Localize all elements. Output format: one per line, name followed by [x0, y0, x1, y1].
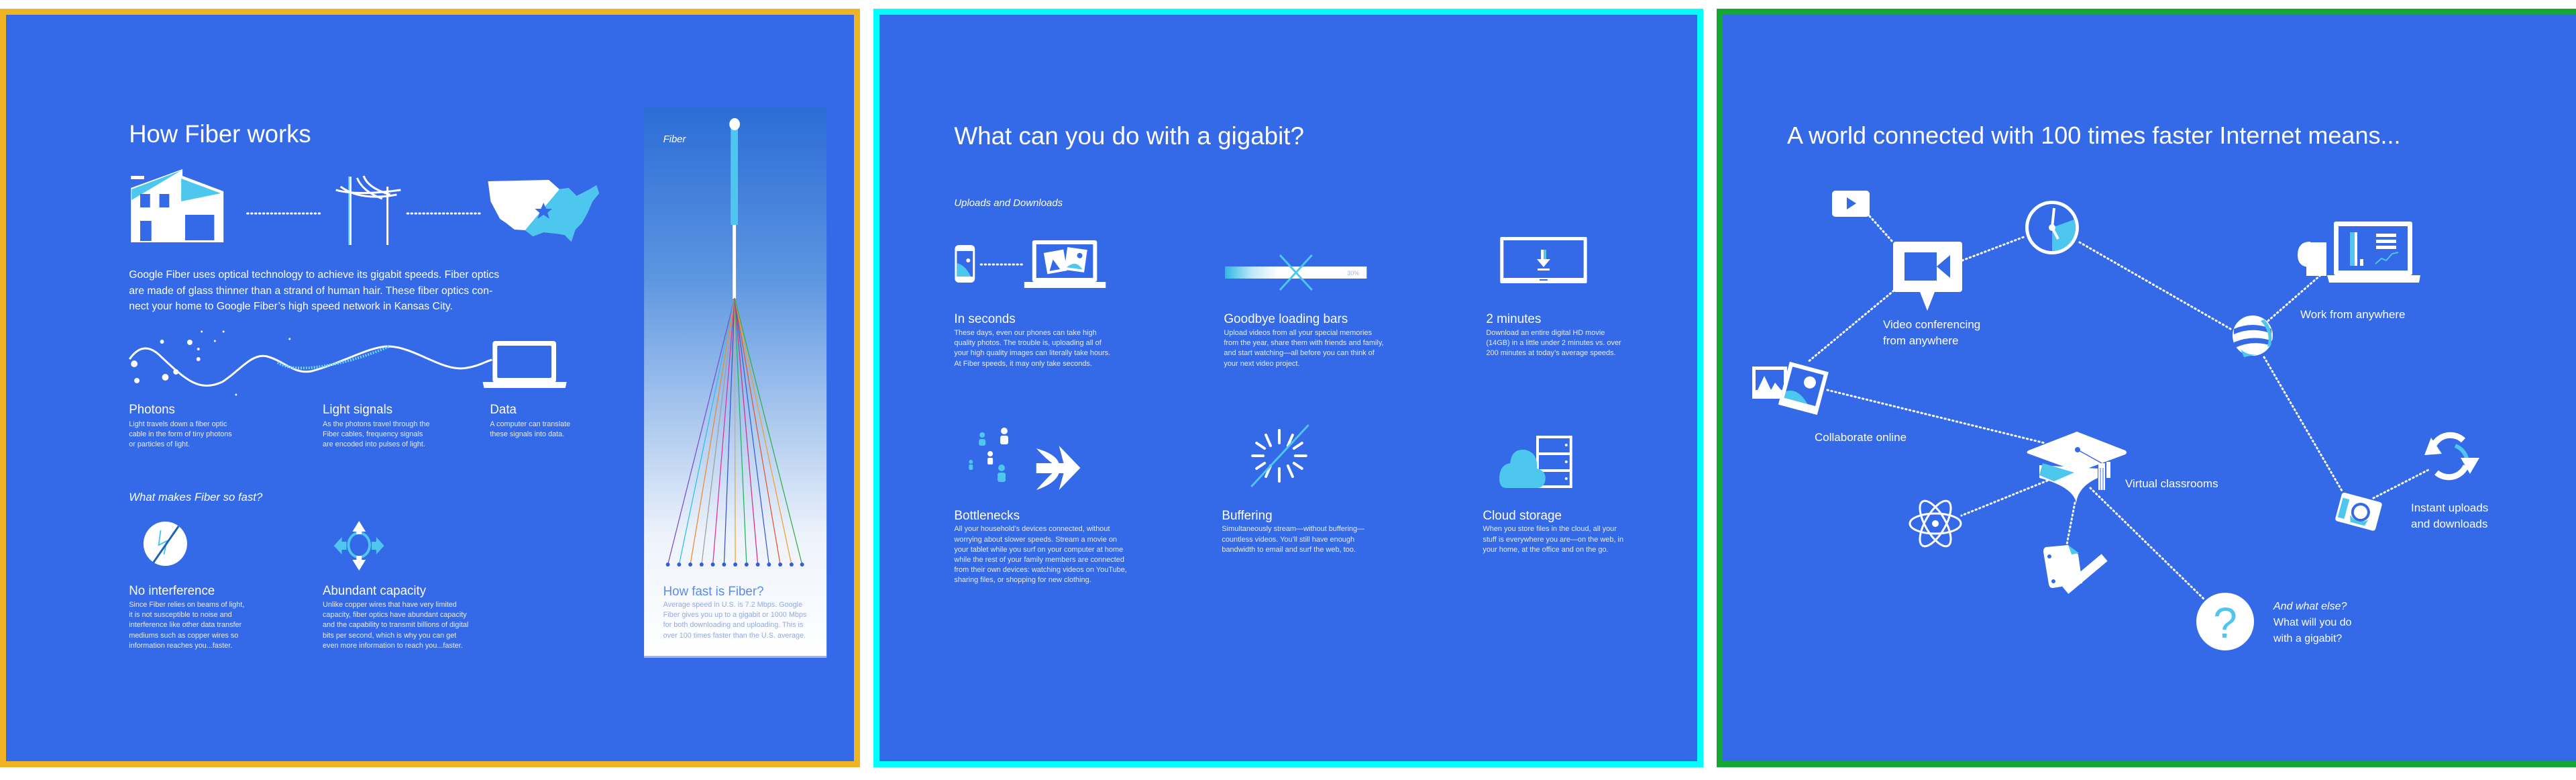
label: instant uploads: and downloads [2411, 518, 2487, 530]
text: no interference: No interference [129, 583, 215, 597]
icon: phone to laptop photos [955, 240, 1106, 288]
text: in seconds: your high quality images can literally take hours. [954, 349, 1110, 357]
text: light signals [323, 402, 430, 448]
text: no interference: information reaches you...faster. [129, 642, 232, 650]
text: photons [129, 402, 232, 448]
illustration: photon wave to laptop [129, 330, 567, 396]
text: abundant capacity: Unlike copper wires that have very limited [323, 601, 457, 609]
label: instant uploads: Instant uploads [2411, 501, 2488, 514]
text: in seconds: These days, even our phones can take high [954, 329, 1097, 337]
text: data: these signals into data. [490, 430, 564, 438]
text: how fast is fiber: Fiber gives you up to a gigabit or 1000 Mbps [663, 611, 807, 619]
label: and what else [2273, 601, 2352, 644]
text: data [490, 402, 570, 438]
text: buffering: bandwidth to email and surf the web, too. [1222, 546, 1356, 554]
connector lines [1807, 216, 2428, 600]
text: no interference [129, 583, 244, 650]
text: photons: Light travels down a fiber optic [129, 420, 227, 428]
text: buffering [1222, 509, 1364, 554]
text: bottlenecks: worrying about slower speeds. Stream a movie on [953, 536, 1117, 544]
text: photons: or particles of light. [129, 440, 190, 448]
panel: a world connected [1720, 12, 2576, 764]
text: light signals: are encoded into pulses of light. [323, 440, 425, 448]
icon: cloud storage [1499, 436, 1572, 488]
text: how fast is fiber: for both downloading and uploading. This is [663, 621, 804, 629]
icon: paper and ruler [2043, 545, 2108, 594]
text: in seconds: In seconds [954, 312, 1016, 326]
label: Fiber: Fiber [663, 134, 686, 145]
icon: abundant capacity [334, 521, 384, 571]
text: abundant capacity: Abundant capacity [323, 583, 427, 597]
text: intro paragraph [129, 269, 499, 312]
icon: no interference [144, 522, 187, 566]
icon: graduation cap [2027, 432, 2127, 503]
text: light signals: Light signals [323, 402, 392, 416]
label: work from anywhere: Work from anywhere [2300, 308, 2406, 321]
panel: how fiber works [3, 12, 857, 764]
text: bottlenecks: your tablet while you surf on your computer at home [954, 546, 1123, 554]
text: 2 minutes: (14GB) in a little under 2 minutes vs. over [1486, 339, 1621, 347]
text: light signals: As the photons travel through the [323, 420, 430, 428]
icon: play button [1832, 191, 1870, 217]
text: goodbye loading bars: your next video project. [1224, 360, 1299, 368]
icon: question mark: ? [2213, 599, 2237, 647]
panel: fiber cable speed [644, 107, 826, 658]
text: bottlenecks [953, 509, 1127, 584]
text: how fast is fiber: Average speed in U.S. is 7.2 Mbps. Google [663, 601, 802, 609]
icon: sync arrows [2424, 435, 2479, 477]
text: abundant capacity: bits per second, which is why you can get [323, 632, 456, 640]
icon: monitor download [1500, 237, 1587, 283]
title: What can you do with a gigabit? [954, 122, 1304, 150]
text: in seconds: At Fiber speeds, it may only take seconds. [954, 360, 1092, 368]
text: how fast is fiber: over 100 times faster than the U.S. average. [663, 632, 806, 640]
text: no interference: it is not susceptible to noise and [129, 611, 232, 619]
text: abundant capacity: capacity, fiber optics have abundant capacity [323, 611, 467, 619]
text: goodbye loading bars: and start watching—all before you can think of [1224, 349, 1375, 357]
panel: what can you do with a gigabit [876, 12, 1700, 764]
label: and what else: And what else? [2273, 601, 2347, 612]
icon: loading bar: 30% [1347, 270, 1359, 277]
icon: buffering spinner [1252, 426, 1308, 486]
title: How Fiber works: How Fiber works [129, 120, 311, 148]
icon: clock [2025, 201, 2079, 254]
icon: house [131, 169, 223, 242]
label: video conferencing: Video conferencing [1883, 318, 1980, 331]
label: video conferencing [1883, 318, 1980, 347]
text: 2 minutes [1486, 312, 1621, 357]
icon: laptop with mug [2298, 222, 2420, 283]
text: how fast is fiber: How fast is Fiber? [663, 584, 763, 598]
icon: camera [2334, 492, 2383, 532]
icon: globe [2233, 315, 2273, 357]
text: data: Data [490, 402, 517, 416]
text: cloud storage: stuff is everywhere you are—on the web, in [1483, 536, 1623, 544]
title: A world connected with 100 times faster Internet means... [1787, 121, 2400, 149]
text: no interference: interference like other data transfer [129, 621, 241, 629]
text: abundant capacity: and the capability to transmit billions of digital [323, 621, 468, 629]
text: intro paragraph: Google Fiber uses optical technology to achieve its gigabit speeds. Fiber optics [129, 269, 499, 281]
icon: video conferencing [1893, 242, 1962, 311]
label: virtual classrooms: Virtual classrooms [2125, 477, 2218, 490]
text: no interference: Since Fiber relies on beams of light, [129, 601, 244, 609]
text: intro paragraph: are made of glass thinner than a strand of human hair. These fiber optics con- [129, 285, 492, 297]
text: no interference: mediums such as copper wires so [129, 632, 238, 640]
text: buffering: Buffering [1222, 509, 1273, 523]
fiber cable [666, 118, 804, 567]
text: data: A computer can translate [490, 420, 570, 428]
text: goodbye loading bars: from the year, share them with friends and family, [1224, 339, 1384, 347]
text: how fast is fiber [663, 584, 807, 640]
text: goodbye loading bars: Upload videos from all your special memories [1224, 329, 1373, 337]
text: in seconds: quality photos. The trouble is, uploading all of [954, 339, 1102, 347]
icon: bottleneck people [969, 428, 1080, 490]
icon: US map [488, 180, 599, 242]
text: cloud storage [1483, 509, 1623, 554]
text: cloud storage: Cloud storage [1483, 509, 1562, 523]
text: cloud storage: When you store files in the cloud, all your [1483, 525, 1617, 533]
text: bottlenecks: All your household’s devices connected, without [954, 525, 1110, 533]
label: video conferencing: from anywhere [1883, 334, 1958, 347]
icon: utility pole [336, 176, 400, 245]
text: 2 minutes: 200 minutes at today’s average speeds. [1486, 349, 1616, 357]
text: photons: Photons [129, 402, 175, 416]
icon: question mark [2196, 593, 2254, 650]
text: bottlenecks: Bottlenecks [954, 509, 1020, 523]
text: goodbye loading bars: Goodbye loading bars [1224, 312, 1348, 326]
subheading: uploads and downloads: Uploads and Downloads [954, 197, 1063, 209]
label: collaborate online: Collaborate online [1815, 431, 1907, 444]
text: bottlenecks: sharing files, or shopping for new clothing. [954, 576, 1091, 584]
icon: laptop [483, 341, 567, 388]
text: abundant capacity [323, 583, 468, 650]
label: and what else: What will you do [2273, 617, 2352, 628]
text: cloud storage: your home, at the office and on the go. [1483, 546, 1609, 554]
icon: collaborate photos [1752, 362, 1829, 415]
text: in seconds [954, 312, 1110, 368]
icon: atom [1910, 497, 1961, 550]
text: bottlenecks: from their own devices: watching videos on YouTube, [954, 566, 1127, 574]
text: bottlenecks: while the rest of your family members are connected [953, 556, 1124, 564]
text: 2 minutes: 2 minutes [1486, 312, 1541, 326]
text: buffering: countless videos. You’ll still have enough [1222, 536, 1354, 544]
text: intro paragraph: nect your home to Google Fiber’s high speed network in Kansas City. [129, 301, 453, 312]
text: abundant capacity: even more information to reach you...faster. [323, 642, 463, 650]
text: goodbye loading bars [1224, 312, 1384, 368]
text: photons: cable in the form of tiny photons [129, 430, 232, 438]
label: and what else: with a gigabit? [2273, 633, 2342, 644]
text: 2 minutes: Download an entire digital HD movie [1486, 329, 1605, 337]
icon: loading bar [1225, 255, 1366, 290]
subheading: what makes fiber so fast: What makes Fiber so fast? [129, 491, 263, 503]
text: light signals: Fiber cables, frequency signals [323, 430, 423, 438]
text: buffering: Simultaneously stream—without buffering— [1222, 525, 1364, 533]
label: instant uploads [2411, 501, 2488, 530]
